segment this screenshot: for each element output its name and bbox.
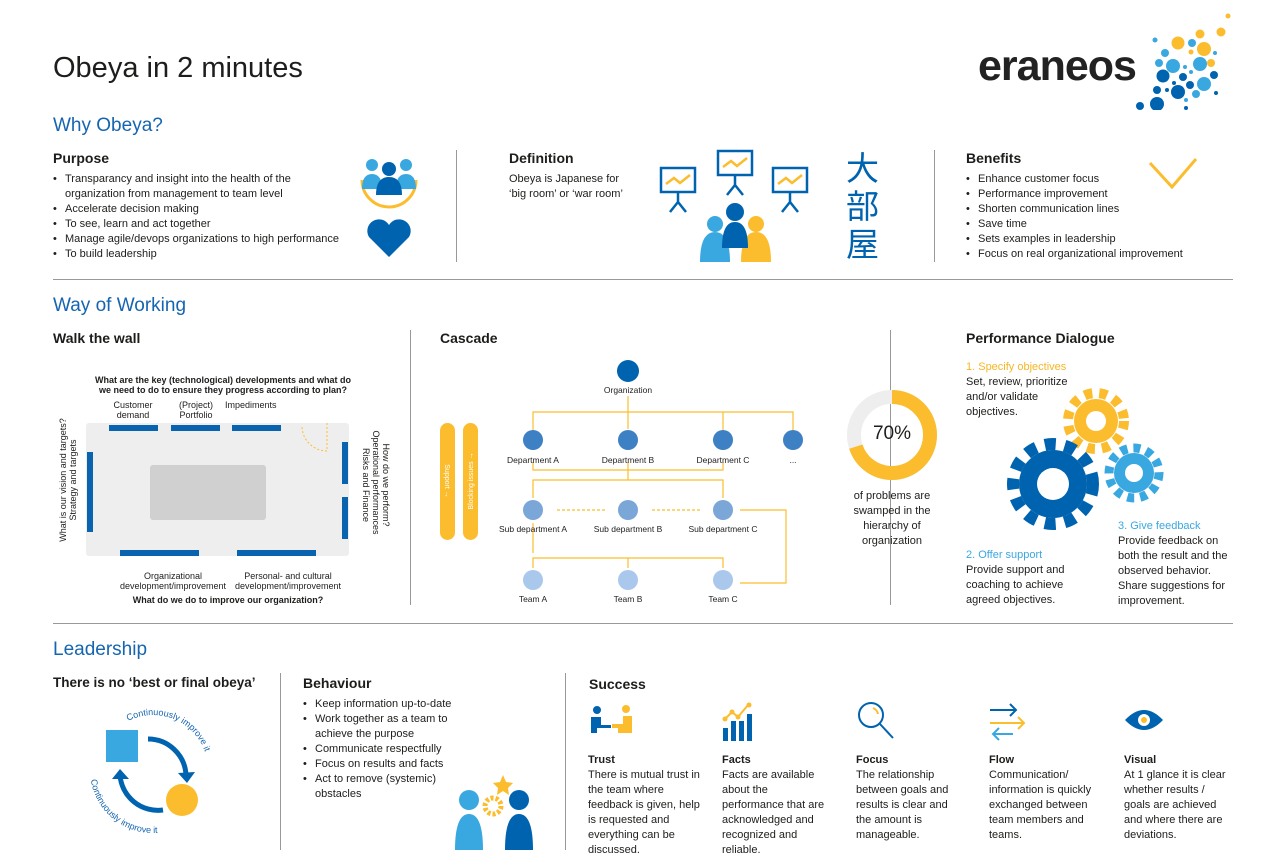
success: flow: Flow [989, 754, 1014, 766]
panel: no best obeya [53, 675, 256, 833]
panel: cascade: Team A [519, 594, 547, 604]
success: facts: Facts [722, 754, 751, 766]
panel: no best obeya: There is no ‘best or final obeya’ [53, 675, 256, 690]
success: flow: Communication/ information is quickly exchanged between team members and teams. [989, 769, 1091, 841]
panel: walk the wall [53, 330, 391, 605]
panel: definition: Definition [509, 150, 574, 166]
panel: benefits: Benefits [966, 150, 1021, 166]
chart: 70% donut: 70% [873, 423, 911, 444]
kanji: 部 [846, 180, 879, 228]
panel: performance dialogue: Provide feedback on both the result and the observed behavior. Share suggestions for improvement. [1118, 535, 1227, 607]
success: focus [856, 702, 948, 841]
panel: purpose: Purpose [53, 150, 109, 166]
panel: walk the wall: What are the key (technological) developments and what do we need to do to ensure they progress according to plan? [95, 375, 351, 395]
logo [978, 14, 1230, 110]
panel: cascade: Sub department C [689, 524, 757, 534]
panel: performance dialogue: Provide support and coaching to achieve agreed objectives. [966, 564, 1064, 606]
success: trust: There is mutual trust in the team where feedback is given, help is requested and everything can be discussed. [588, 769, 700, 856]
success: visual [1124, 710, 1226, 841]
icon: war room boards and people [660, 150, 808, 262]
panel: cascade: Department A [507, 455, 559, 465]
panel: walk the wall: Walk the wall [53, 330, 140, 346]
panel: performance dialogue [966, 330, 1227, 607]
heading: Why Obeya: Why Obeya? [53, 115, 163, 136]
kanji [846, 142, 879, 266]
panel: performance dialogue: 1. Specify objectives [966, 361, 1066, 373]
panel: behaviour: Focus on results and facts [315, 758, 443, 770]
success: trust [588, 705, 700, 856]
kanji: 屋 [846, 218, 879, 266]
panel: benefits: Focus on real organizational improvement [978, 248, 1183, 260]
panel: cascade: Team C [708, 594, 738, 604]
panel: cascade: Team B [614, 594, 643, 604]
panel: behaviour: Behaviour [303, 675, 371, 691]
panel: no best obeya: Continuously improve it [91, 780, 158, 833]
panel: purpose: Accelerate decision making [65, 203, 199, 215]
panel: purpose: Manage agile/devops organizations to high performance [65, 233, 339, 245]
panel: purpose: Transparancy and insight into the health of the organization from management to team level [65, 173, 291, 200]
kanji: 大 [846, 142, 879, 190]
success: facts [722, 702, 824, 856]
panel: cascade: Department C [697, 455, 749, 465]
panel: purpose: To see, learn and act together [65, 218, 211, 230]
title: Obeya in 2 minutes [53, 52, 303, 84]
panel: cascade: Cascade [440, 330, 498, 346]
panel: performance dialogue: 2. Offer support [966, 549, 1042, 561]
success: focus: The relationship between goals and results is clear and the amount is manageable. [856, 769, 948, 841]
panel: cascade: Support → [443, 464, 450, 498]
success: visual: At 1 glance it is clear whether results / goals are achieved and where there are deviations. [1124, 769, 1226, 841]
logo: eraneos [978, 42, 1136, 90]
panel: walk the wall: What is our vision and targets? Strategy and targets [58, 418, 78, 542]
panel: performance dialogue: Performance Dialogue [966, 330, 1115, 346]
panel: cascade: Sub department B [594, 524, 663, 534]
panel: walk the wall: Impediments [225, 400, 277, 410]
panel: performance dialogue: 3. Give feedback [1118, 520, 1201, 532]
icon: check [1149, 158, 1197, 190]
panel: walk the wall: What do we do to improve our organization? [133, 595, 323, 605]
panel: walk the wall: Personal- and cultural development/improvement [235, 571, 341, 591]
panel: purpose [53, 150, 339, 260]
panel: benefits: Performance improvement [978, 188, 1108, 200]
panel: performance dialogue: Set, review, prioritize and/or validate objectives. [966, 376, 1067, 418]
success: trust: Trust [588, 754, 615, 766]
success: visual: Visual [1124, 754, 1156, 766]
panel: walk the wall: (Project) Portfolio [179, 400, 213, 420]
panel: cascade: Blocking issues → [468, 452, 475, 510]
success: facts: Facts are available about the performance that are acknowledged and recognized and reliable. [722, 769, 824, 856]
panel: behaviour: Communicate respectfully [315, 743, 442, 755]
panel: behaviour [303, 675, 451, 800]
panel: benefits [966, 150, 1183, 260]
panel: benefits: Enhance customer focus [978, 173, 1099, 185]
panel: behaviour: Work together as a team to achieve the purpose [315, 713, 447, 740]
panel: benefits: Sets examples in leadership [978, 233, 1116, 245]
panel: purpose: To build leadership [65, 248, 157, 260]
panel: walk the wall: How do we perform? Operational performances Risks and Finance [361, 430, 391, 540]
icon: team with star [455, 775, 533, 850]
panel: benefits: Shorten communication lines [978, 203, 1119, 215]
panel: walk the wall: Customer demand [113, 400, 152, 420]
panel: cascade: Department B [602, 455, 655, 465]
heading: leadership: Leadership [53, 639, 147, 660]
panel: cascade: ... [789, 455, 797, 465]
success: focus: Focus [856, 754, 888, 766]
panel: no best obeya: Continuously improve it [126, 708, 210, 752]
heading: way of working: Way of Working [53, 295, 186, 316]
panel: walk the wall: Organizational development/improvement [120, 571, 226, 591]
panel: behaviour: Act to remove (systemic) obstacles [315, 773, 436, 800]
chart: 70% donut: of problems are swamped in the hierarchy of organization [853, 490, 931, 547]
panel: definition [509, 150, 623, 200]
chart: 70% donut [847, 390, 937, 547]
panel: benefits: Save time [978, 218, 1027, 230]
icon: team and heart [360, 159, 418, 257]
panel: definition: ‘big room’ or ‘war room’ [509, 188, 623, 200]
panel: definition: Obeya is Japanese for [509, 173, 619, 185]
success: flow [989, 703, 1092, 841]
panel: cascade: Organization [604, 385, 652, 395]
heading: success: Success [589, 676, 646, 692]
panel: cascade: Sub department A [499, 524, 567, 534]
panel: cascade [440, 330, 803, 604]
panel: behaviour: Keep information up-to-date [315, 698, 451, 710]
